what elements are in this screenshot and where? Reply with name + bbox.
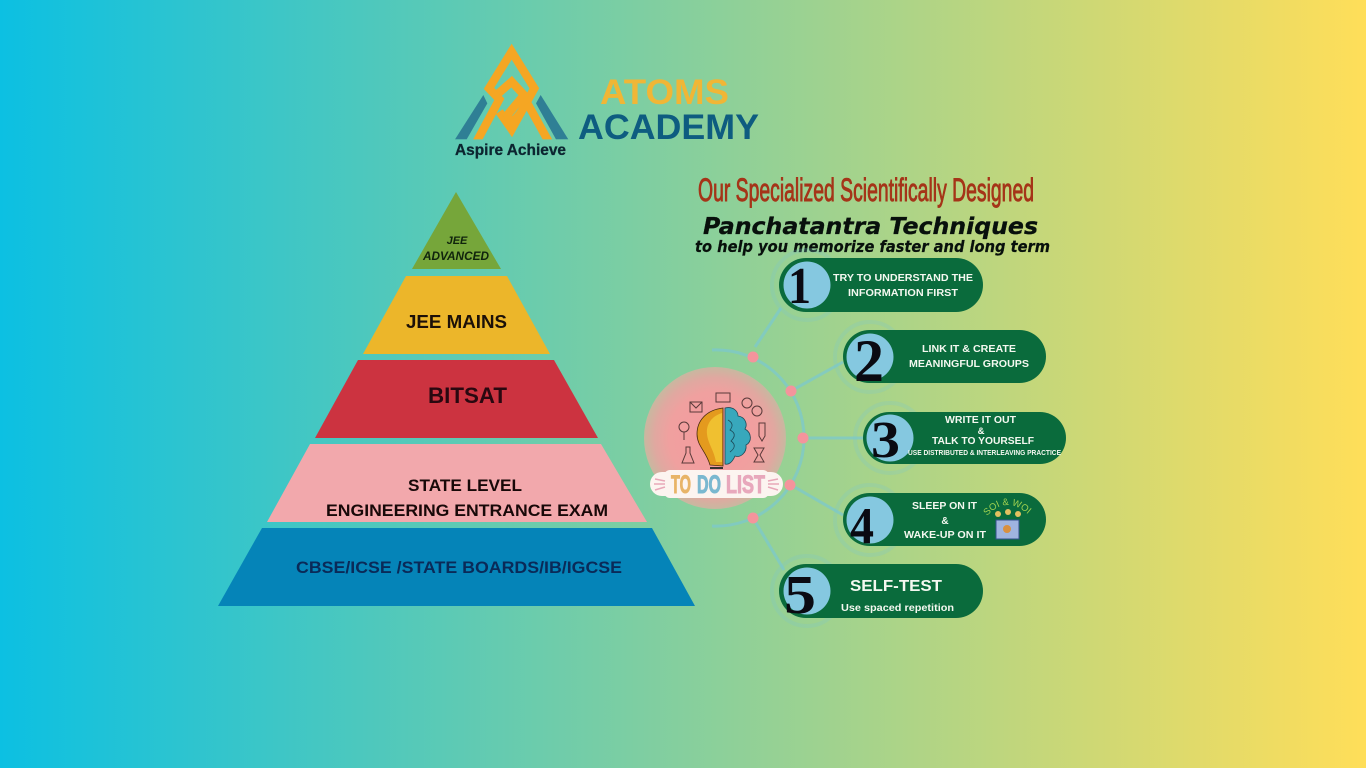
sticker: To Do List: LIST [726,471,765,499]
sticker: To Do List [650,470,783,499]
technique 5: SELF-TEST [850,578,942,595]
technique 5: Use spaced repetition [841,602,954,614]
technique 3: & [978,426,985,437]
pyramid tier: BITSAT: BITSAT [428,383,508,408]
icons: surrounding study symbols [679,393,765,463]
connector network [712,250,925,626]
technique 5: 5 [784,564,816,625]
pyramid tier: JEE Advanced: JEE [447,235,468,247]
technique 4: WAKE-UP ON IT [904,529,987,541]
pyramid tier: State level: ENGINEERING ENTRANCE EXAM [326,501,608,520]
technique 2: MEANINGFUL GROUPS [909,358,1029,370]
technique 1: INFORMATION FIRST [848,287,959,299]
central hub: bulb and brain with To Do List [644,367,786,509]
technique 1: 1 [788,258,811,315]
technique 2: 2 [854,328,884,394]
technique 3: USE DISTRIBUTED & INTERLEAVING PRACTICE [908,450,1061,457]
pyramid tier: JEE Mains: JEE MAINS [406,312,507,332]
technique 3: TALK TO YOURSELF [932,435,1035,447]
pyramid tier: Boards [218,528,695,606]
pyramid tier: JEE Advanced: ADVANCED [422,251,489,263]
heading: Panchatantra Techniques: Panchatantra Techniques [703,214,1038,240]
technique 3: WRITE IT OUT [945,414,1017,426]
technique 1 [779,258,983,315]
technique 4 [843,493,1046,555]
pyramid chart [218,192,695,606]
pyramid tier: JEE Mains [363,276,550,354]
logo tagline: Aspire Achieve [455,142,566,159]
technique 4: SLEEP ON IT [912,500,978,512]
icon: bulb half [697,408,723,468]
logo word: ATOMS: ATOMS [600,73,729,112]
pyramid tier: Boards: CBSE/ICSE /STATE BOARDS/IB/IGCSE [296,558,622,577]
pyramid tier: State level [267,444,647,522]
pyramid tier: State level: STATE LEVEL [408,476,522,495]
subheading: to help you memorize faster and long term [695,237,1050,256]
logo: Atoms Academy [455,52,759,159]
badge: SOI & WOI: SOI & WOI [984,498,1032,515]
technique 1: TRY TO UNDERSTAND THE [833,272,973,284]
technique 4: & [941,516,949,527]
technique 2 [843,328,1046,394]
heading: Our Specialized Scientifically Designed: Our Specialized Scientifically Designed [698,172,1034,208]
pyramid tier: JEE Advanced [412,192,501,269]
icon: logo mark [455,52,568,142]
hub glow [644,367,786,509]
sticker: To Do List: DO [697,471,721,499]
technique 5 [779,564,983,625]
icon: brain half [725,408,750,464]
technique 3 [863,412,1066,469]
pyramid tier: BITSAT [315,360,598,438]
technique 4: 4 [850,498,874,555]
logo word: ACADEMY: ACADEMY [578,108,759,147]
badge: SOI & WOI [984,498,1032,540]
sticker: To Do List: TO [671,471,691,499]
technique 3: 3 [871,412,900,469]
technique 2: LINK IT & CREATE [922,343,1016,355]
